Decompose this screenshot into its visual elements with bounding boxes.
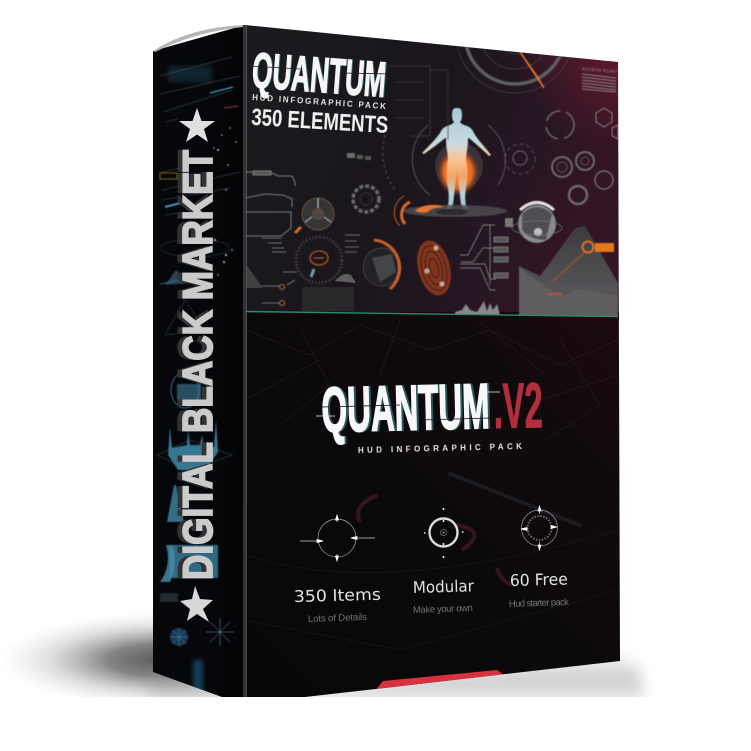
title: Quantum: QUANTUM xyxy=(250,42,388,108)
icon: target modular xyxy=(424,508,464,558)
feature: modular: Modular xyxy=(413,576,474,597)
main title: Quantum V2: QUANTUM xyxy=(321,370,490,446)
faint schematic lines xyxy=(347,66,448,160)
data sphere xyxy=(505,202,562,243)
body scan figure xyxy=(383,108,507,217)
feature: 350 items: 350 Items xyxy=(294,585,381,606)
radar dial xyxy=(456,46,570,94)
green divider line xyxy=(245,312,618,316)
main title: Quantum V2 xyxy=(316,382,542,445)
spine HUD details xyxy=(157,57,240,697)
caption: lots of details: Lots of Details xyxy=(308,612,367,625)
feature: 350 items xyxy=(295,589,380,622)
flow schematic xyxy=(460,225,508,290)
front panel xyxy=(245,0,620,702)
caption: make your own: Make your own xyxy=(413,603,473,616)
tech frame left xyxy=(245,171,295,236)
access point text block xyxy=(582,66,618,92)
red tab xyxy=(376,670,504,689)
hex cluster xyxy=(596,108,618,139)
headline: 350 Elements: 350 ELEMENTS xyxy=(251,104,389,139)
title: Quantum xyxy=(252,52,387,98)
terrain mountains xyxy=(519,226,618,318)
product image panel xyxy=(246,46,618,316)
caption: hud starter pack: Hud starter pack xyxy=(509,597,569,610)
main subtitle: HUD INFOGRAPHIC PACK xyxy=(358,442,522,455)
icon: top star xyxy=(179,108,215,142)
title: Quantum: QUANTUM xyxy=(251,42,389,108)
spine title: Digital Black Market: DIGITAL BLACK MARKET xyxy=(169,150,216,580)
faint grey band xyxy=(448,473,582,526)
faint red arcs xyxy=(358,495,512,585)
label lines and dots xyxy=(262,227,360,306)
feature: 60 free: 60 Free xyxy=(510,569,568,590)
access point text block: ACCESS POINT xyxy=(582,66,618,74)
icon: crosshair 350 items xyxy=(300,515,375,561)
feature: modular xyxy=(414,580,474,614)
faint network background xyxy=(245,320,618,650)
drop shadow under box xyxy=(17,617,648,697)
icon: bottom star xyxy=(180,586,213,622)
spine title: Digital Black Market: DIGITAL BLACK MARKET xyxy=(174,150,221,580)
spine and front divider xyxy=(243,25,246,697)
box top edge highlight xyxy=(153,25,245,52)
icon: dial 60 free xyxy=(521,506,558,550)
orange callout xyxy=(582,242,614,252)
feature: 60 free xyxy=(510,574,569,608)
mini histogram xyxy=(455,301,500,315)
V2 label: .V2 xyxy=(493,369,543,442)
main title: Quantum V2: QUANTUM xyxy=(323,370,492,446)
subtitle: HUD Infographic Pack: HUD INFOGRAPHIC PACK xyxy=(252,93,386,111)
gauge dials left xyxy=(296,186,410,289)
box spine panel xyxy=(153,27,243,697)
round gauges xyxy=(505,111,613,204)
fingerprint xyxy=(416,240,452,296)
